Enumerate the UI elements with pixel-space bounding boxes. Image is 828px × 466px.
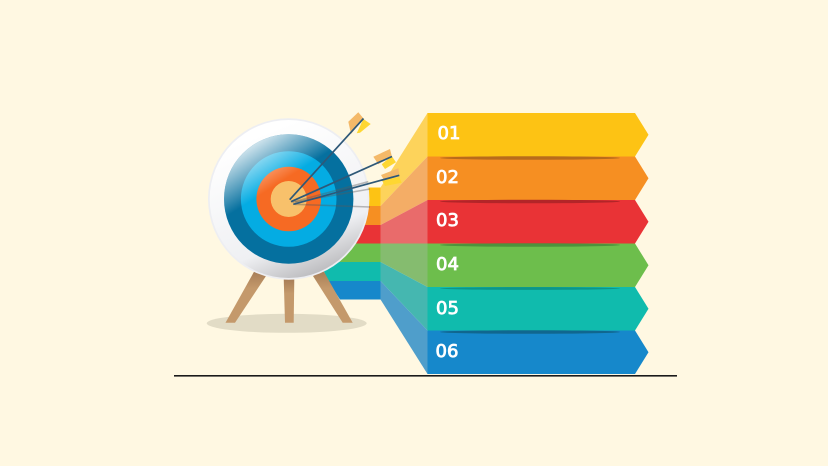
arrow 2 bbox=[291, 149, 396, 202]
band 03: 03 bbox=[436, 210, 459, 231]
band 01 bbox=[428, 113, 648, 156]
band 02: 02 bbox=[436, 167, 459, 188]
arrow shadows on the target bbox=[292, 182, 370, 207]
band 03 bbox=[428, 200, 648, 244]
band 06: 06 bbox=[436, 341, 458, 362]
band 05 bbox=[428, 287, 648, 330]
folded connector panels bbox=[380, 113, 428, 374]
band 06 bbox=[428, 330, 648, 374]
baseline bbox=[174, 375, 677, 377]
band 05: 05 bbox=[436, 298, 459, 319]
tripod legs bbox=[226, 270, 353, 323]
target board bbox=[208, 118, 369, 280]
band 04: 04 bbox=[436, 254, 459, 275]
band 02 bbox=[428, 156, 648, 200]
band 01: 01 bbox=[438, 123, 460, 144]
arrow 3 bbox=[293, 168, 402, 204]
ground shadow bbox=[207, 314, 367, 333]
arrow 1 bbox=[290, 112, 371, 200]
band 04 bbox=[428, 243, 648, 287]
back strips of the coloured bands bbox=[320, 188, 380, 300]
